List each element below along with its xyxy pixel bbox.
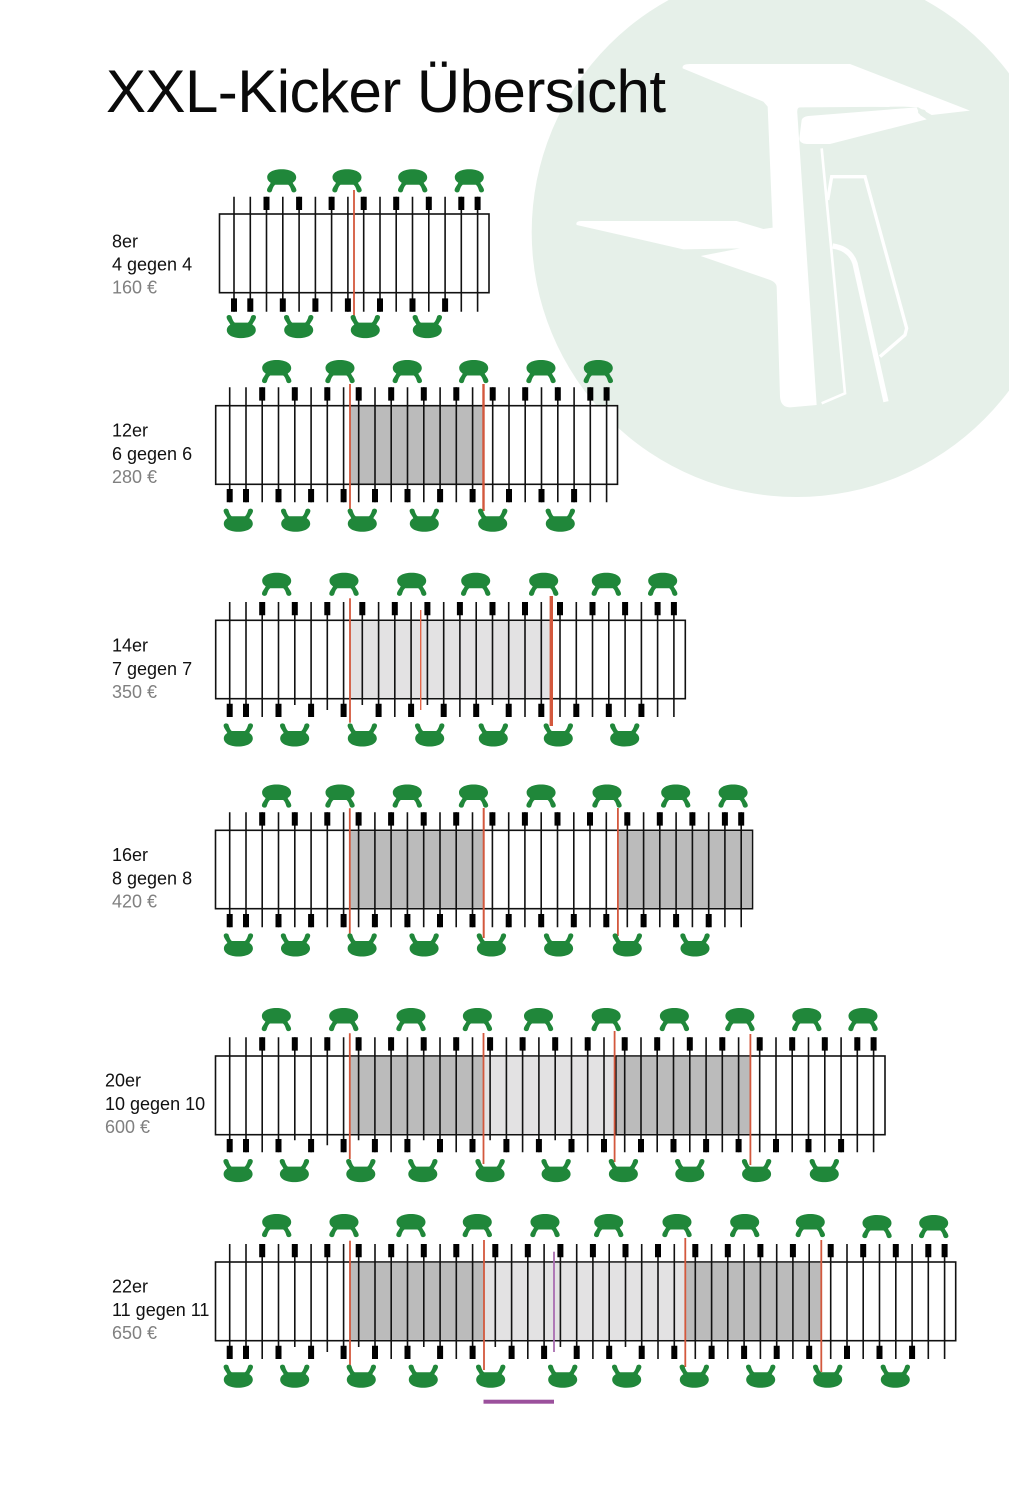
divider line <box>353 190 355 317</box>
label: 14er, 7 gegen 7, 350 euro: 350 € <box>112 682 157 702</box>
label: 12er, 6 gegen 6, 280 euro: 12er <box>112 420 148 440</box>
players top <box>267 169 484 192</box>
label: 8er, 4 gegen 4, 160 euro: 160 € <box>112 278 157 298</box>
row: 12er table <box>112 360 618 532</box>
table with dark, light, dark modules <box>216 1056 885 1135</box>
players top <box>262 1008 878 1031</box>
divider lines <box>350 1031 750 1165</box>
label: 8er, 4 gegen 4, 160 euro: 8er <box>112 232 138 252</box>
players top <box>262 1214 948 1238</box>
row: 16er table <box>112 784 752 956</box>
players top <box>262 573 677 596</box>
label: 12er, 6 gegen 6, 280 euro: 280 € <box>112 467 157 487</box>
players top <box>262 360 613 383</box>
players bottom <box>224 723 639 746</box>
label: 8er, 4 gegen 4, 160 euro: 4 gegen 4 <box>112 254 192 274</box>
row: 8er table <box>112 169 489 338</box>
label: 22er, 11 gegen 11, 650 euro: 650 € <box>112 1323 157 1343</box>
table with dark, light, dark modules <box>216 1262 956 1341</box>
divider lines <box>350 596 551 726</box>
label: 16er, 8 gegen 8, 420 euro: 420 € <box>112 892 157 912</box>
purple marker line <box>553 1252 555 1352</box>
players bottom <box>224 933 710 956</box>
row: 14er table <box>112 573 685 746</box>
rods and handles <box>230 387 607 502</box>
label: 20er, 10 gegen 10, 600 euro: 600 € <box>105 1117 150 1137</box>
title: XXL-Kicker Übersicht <box>106 58 666 125</box>
label: 20er, 10 gegen 10, 600 euro: 10 gegen 10 <box>105 1094 205 1114</box>
players bottom <box>223 1159 839 1182</box>
rods and handles <box>230 602 674 717</box>
label: 22er, 11 gegen 11, 650 euro: 11 gegen 11 <box>112 1300 209 1320</box>
rods and handles <box>230 812 741 927</box>
rods and handles <box>234 197 478 312</box>
row: 20er table <box>105 1008 885 1182</box>
label: 16er, 8 gegen 8, 420 euro: 16er <box>112 845 148 865</box>
divider lines <box>350 1238 821 1372</box>
label: 14er, 7 gegen 7, 350 euro: 14er <box>112 636 148 656</box>
players bottom <box>224 509 575 532</box>
label: 12er, 6 gegen 6, 280 euro: 6 gegen 6 <box>112 444 192 464</box>
rods and handles <box>230 1037 874 1152</box>
row: 22er table <box>112 1214 956 1404</box>
purple width bar <box>484 1400 554 1404</box>
rods and handles <box>230 1244 945 1359</box>
table with two dark modules <box>216 830 752 909</box>
label: 16er, 8 gegen 8, 420 euro: 8 gegen 8 <box>112 868 192 888</box>
players top <box>262 784 748 808</box>
label: 14er, 7 gegen 7, 350 euro: 7 gegen 7 <box>112 659 192 679</box>
background logo: green circle with white table-football figure <box>532 0 1009 497</box>
divider lines <box>350 808 618 938</box>
label: 22er, 11 gegen 11, 650 euro: 22er <box>112 1276 148 1296</box>
table with light centre module <box>216 620 685 699</box>
players bottom <box>227 315 442 338</box>
table outline <box>220 214 489 293</box>
label: 20er, 10 gegen 10, 600 euro: 20er <box>105 1070 141 1090</box>
table with dark centre module <box>216 406 617 484</box>
divider lines <box>350 384 484 511</box>
players bottom <box>224 1365 910 1388</box>
